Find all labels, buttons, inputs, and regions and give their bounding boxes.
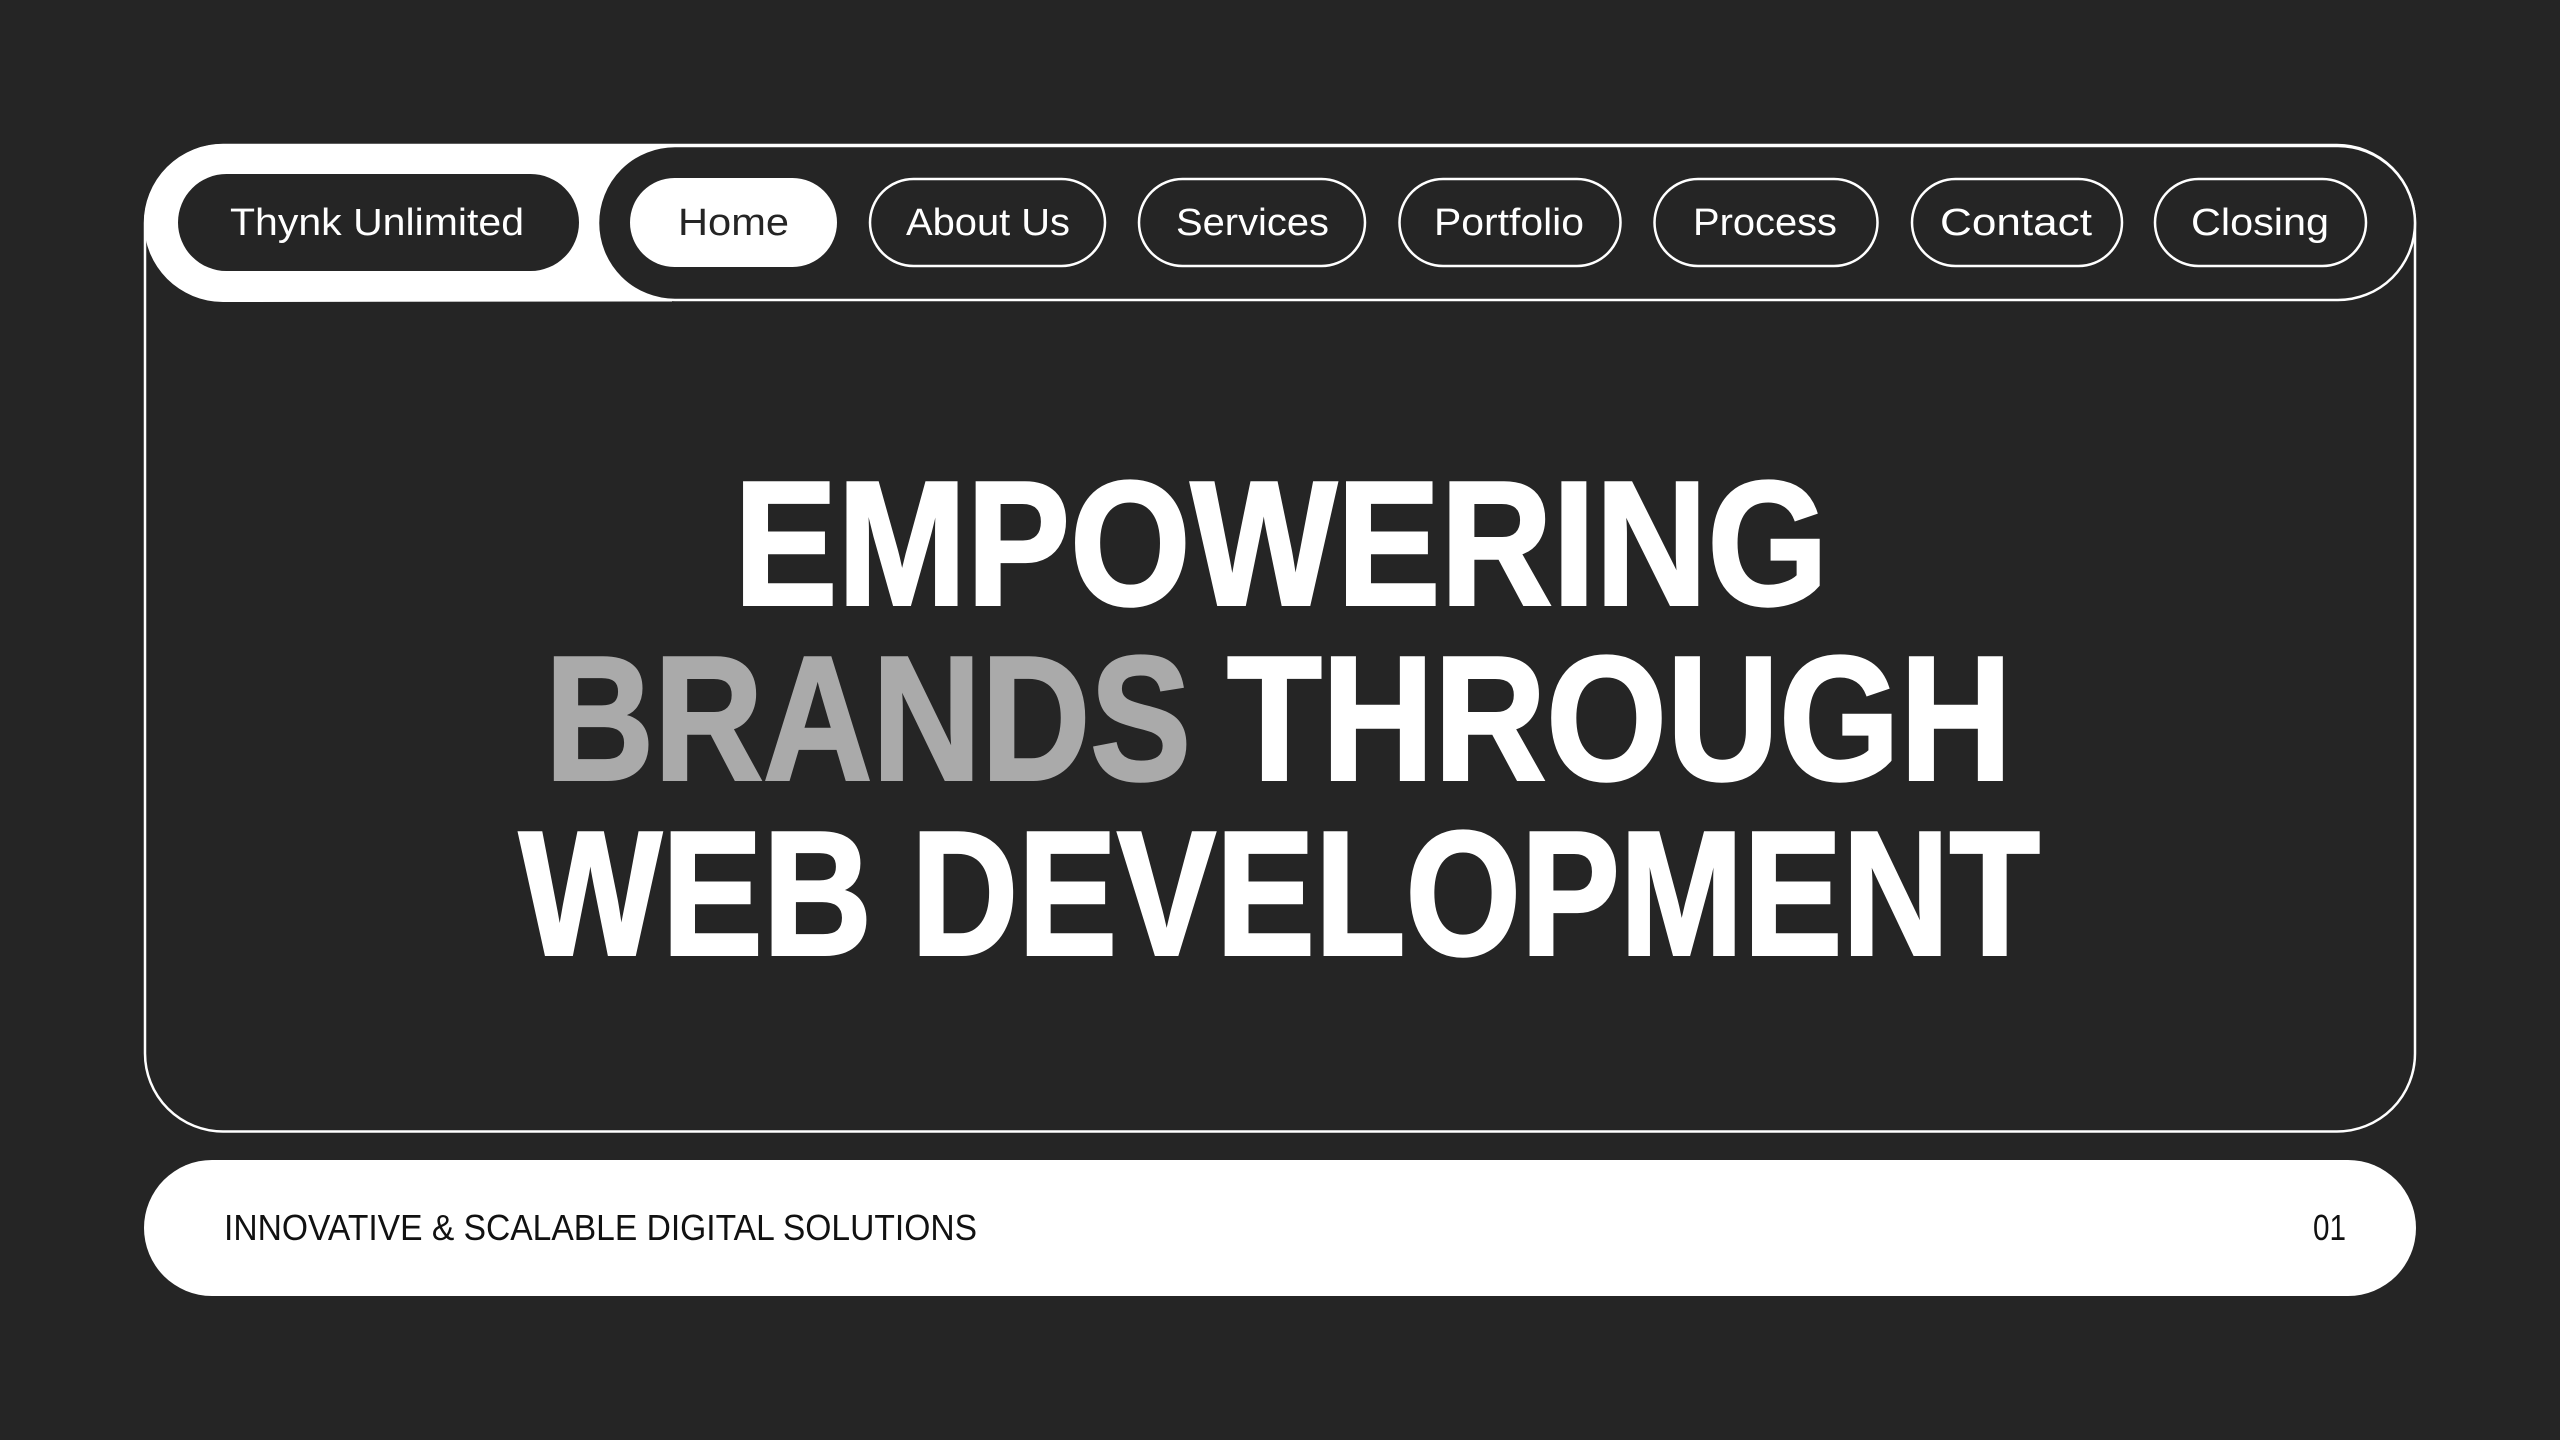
nav button: Closing: Closing (2191, 202, 2329, 244)
nav button: Services (1139, 179, 1365, 266)
main title (519, 444, 2040, 992)
title line 2: highlighted word: BRANDS (545, 620, 1191, 818)
brand pill: Thynk Unlimited (178, 174, 579, 271)
title line 2: remainder: THROUGH (1227, 620, 2012, 818)
nav button: About Us: About Us (906, 202, 1070, 244)
main outlined frame (145, 145, 2415, 1132)
nav button: Portfolio: Portfolio (1434, 202, 1584, 244)
nav button: Portfolio (1400, 179, 1620, 266)
title line 3: second word: DEVELOPMENT (911, 794, 2040, 992)
footer tagline: INNOVATIVE & SCALABLE DIGITAL SOLUTIONS (224, 1207, 977, 1248)
nav button: Process: Process (1693, 202, 1837, 244)
page number: 01 (2313, 1207, 2346, 1248)
nav button: Services: Services (1176, 202, 1329, 244)
nav button: Closing (2155, 179, 2366, 266)
nav button: Home (active): Home (678, 202, 789, 244)
title line 1: EMPOWERING (734, 444, 1828, 642)
nav button: Process (1654, 179, 1878, 266)
nav button: Home (active) (630, 178, 837, 267)
footer bar (144, 1160, 2416, 1296)
title line 3: first word: WEB (519, 794, 872, 992)
nav button: Contact: Contact (1940, 202, 2093, 244)
nav button: Contact (1912, 179, 2122, 266)
brand pill: Thynk Unlimited: Thynk Unlimited (230, 202, 524, 244)
nav container pill (598, 146, 2415, 300)
navigation bar (144, 144, 2415, 302)
nav button: About Us (870, 179, 1105, 266)
brand tab: white backing (144, 144, 672, 302)
